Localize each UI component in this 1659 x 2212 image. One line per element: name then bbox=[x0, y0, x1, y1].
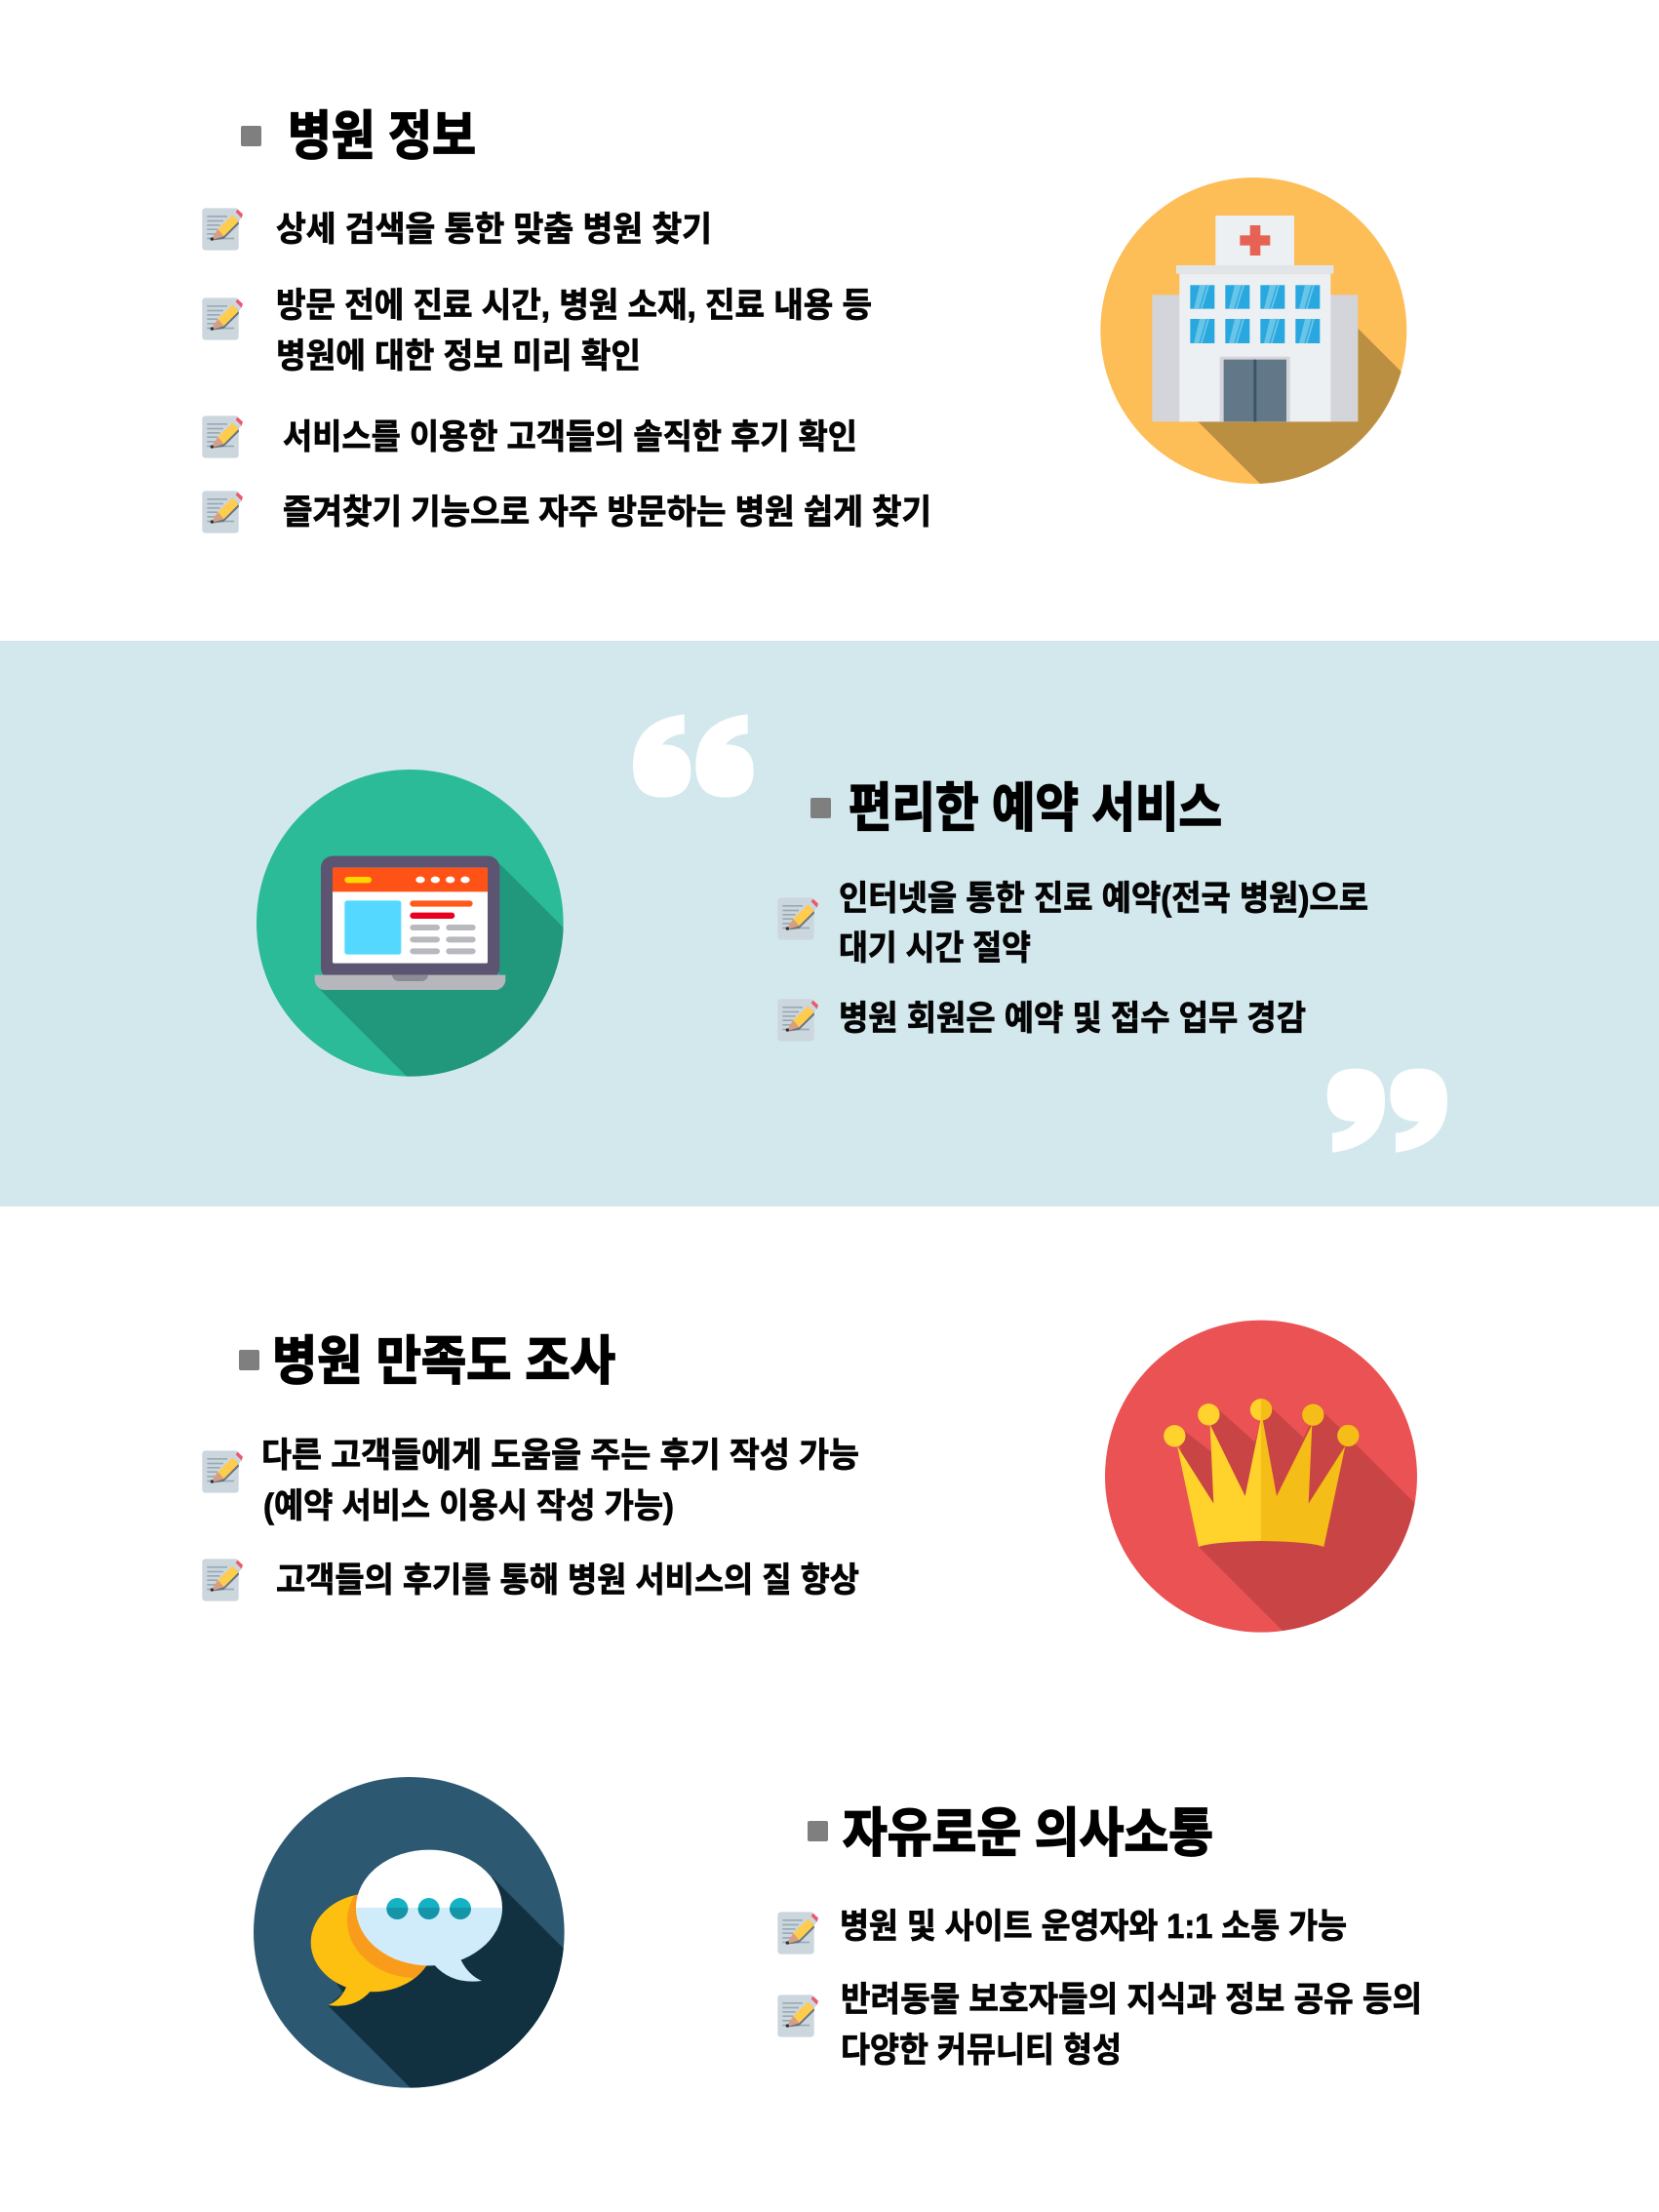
list item: check info before visit bbox=[202, 287, 872, 375]
list item: check info before visit: 방문 전에 진료 시간, 병원 소재, 진료 내용 등 bbox=[276, 287, 872, 325]
list item: service quality: 고객들의 후기를 통해 병원 서비스의 질 향상 bbox=[276, 1561, 859, 1600]
panel: reservation band background bbox=[0, 641, 1659, 1206]
heading: convenient reservation: 편리한 예약 서비스 bbox=[849, 779, 1222, 838]
list item: reduced workload: 병원 회원은 예약 및 접수 업무 경감 bbox=[839, 1000, 1306, 1038]
list item: one-to-one communication: 병원 및 사이트 운영자와 1:1 소통 가능 bbox=[840, 1908, 1347, 1946]
panel: hospital information bbox=[202, 107, 931, 533]
list item: check info before visit: 병원에 대한 정보 미리 확인 bbox=[276, 337, 641, 375]
quote mark: opening bbox=[633, 714, 754, 798]
list item: knowledge sharing community bbox=[777, 1981, 1422, 2070]
panel: free communication bbox=[777, 1804, 1422, 2070]
heading: hospital information: 병원 정보 bbox=[288, 107, 476, 166]
list item: favorites: 즐겨찾기 기능으로 자주 방문하는 병원 쉽게 찾기 bbox=[283, 494, 931, 532]
icon: laptop bbox=[257, 770, 564, 1077]
panel: hospital satisfaction survey bbox=[202, 1332, 859, 1601]
list item: write reviews: (예약 서비스 이용시 작성 가능) bbox=[263, 1487, 674, 1525]
icon: hospital bbox=[1100, 178, 1406, 484]
list item: detailed search: 상세 검색을 통한 맞춤 병원 찾기 bbox=[276, 211, 712, 249]
panel: convenient reservation service bbox=[777, 779, 1368, 1042]
list item: online reservation bbox=[777, 880, 1368, 968]
heading: satisfaction survey: 병원 만족도 조사 bbox=[272, 1332, 615, 1391]
list item: online reservation: 대기 시간 절약 bbox=[839, 929, 1031, 968]
list item: write reviews bbox=[202, 1437, 859, 1525]
list item: write reviews: 다른 고객들에게 도움을 주는 후기 작성 가능 bbox=[261, 1437, 859, 1475]
list item: honest reviews: 서비스를 이용한 고객들의 솔직한 후기 확인 bbox=[283, 418, 857, 456]
quote mark: closing bbox=[1327, 1069, 1447, 1153]
list item: knowledge sharing community: 다양한 커뮤니티 형성 bbox=[841, 2032, 1122, 2070]
list item: knowledge sharing community: 반려동물 보호자들의 지식과 정보 공유 등의 bbox=[841, 1981, 1422, 2019]
list item: online reservation: 인터넷을 통한 진료 예약(전국 병원)으로 bbox=[839, 880, 1368, 918]
list item: one-to-one communication bbox=[777, 1908, 1347, 1955]
icon: crown bbox=[1105, 1321, 1417, 1633]
heading: free communication: 자유로운 의사소통 bbox=[843, 1804, 1213, 1863]
icon: chat bubbles bbox=[254, 1777, 565, 2088]
